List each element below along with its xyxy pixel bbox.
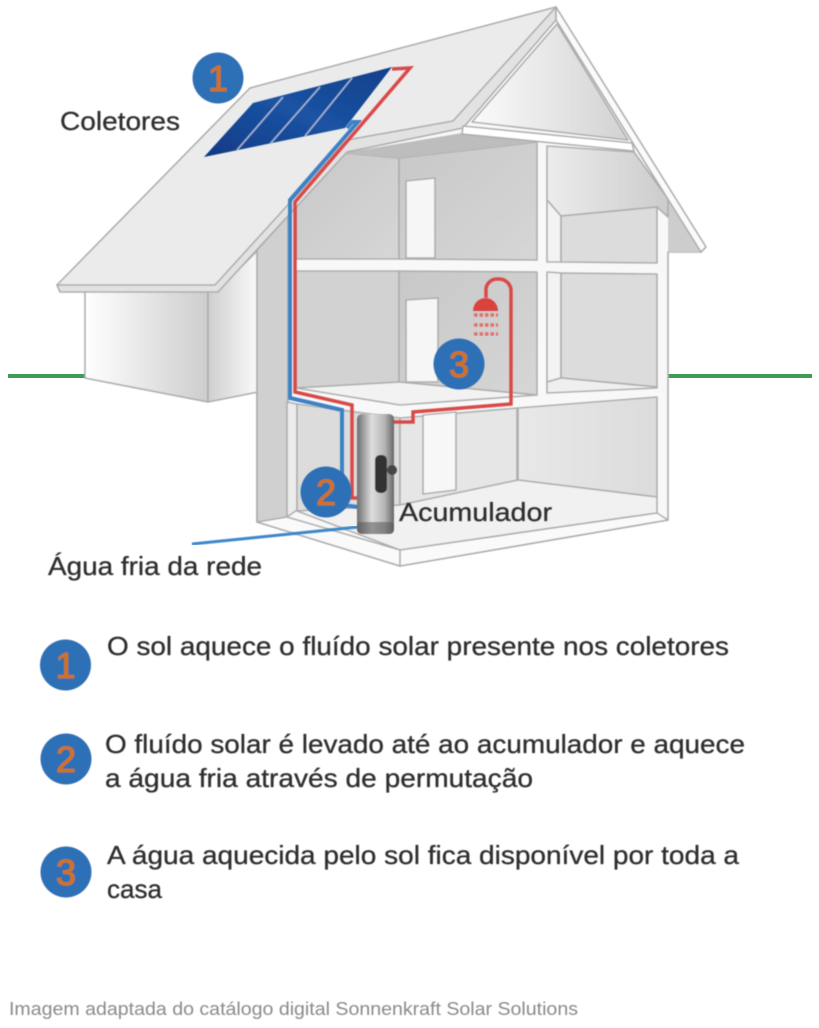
badge 3 diagram — [434, 338, 484, 390]
step 3: 3 — [56, 852, 76, 893]
step 2 — [40, 729, 745, 793]
label: Água fria da rede: Água fria da rede — [48, 551, 262, 581]
ground line left — [8, 374, 85, 378]
badge 2 diagram: 2 — [316, 472, 336, 513]
storage tank — [357, 414, 397, 534]
badge 2 diagram — [300, 466, 352, 518]
step 2: 2 — [56, 739, 76, 780]
badge 1 diagram — [192, 52, 244, 104]
red pipe to shower — [393, 279, 511, 422]
step 2: a água fria através de permutação — [105, 763, 533, 793]
ground floor rooms — [257, 397, 668, 566]
label: Acumulador: Acumulador — [399, 497, 552, 527]
step 1 — [40, 631, 729, 690]
middle floor rooms — [296, 271, 657, 405]
blue cold pipe — [290, 122, 358, 507]
badge 3 diagram: 3 — [449, 344, 469, 385]
label: Coletores: Coletores — [60, 106, 180, 136]
step 3: casa — [107, 874, 163, 904]
solar collectors — [204, 67, 392, 157]
gable triangle — [462, 7, 706, 252]
house body — [257, 20, 701, 566]
annex volume — [85, 250, 258, 402]
step 2: O fluído solar é levado até ao acumulador e aquece — [105, 729, 745, 759]
step 3 — [40, 840, 740, 904]
ground line right — [668, 374, 812, 378]
step 1: O sol aquece o fluído solar presente nos coletores — [107, 631, 729, 661]
step 3: A água aquecida pelo sol fica disponível por toda a — [107, 840, 740, 870]
main roof — [57, 7, 556, 292]
badge 1 diagram: 1 — [208, 58, 228, 99]
red hot pipe — [295, 68, 410, 498]
upper floor rooms — [296, 133, 668, 263]
image credit caption: Imagem adaptada do catálogo digital Sonnenkraft Solar Solutions — [9, 999, 578, 1019]
cold water inlet pipe — [192, 527, 358, 544]
step 1: 1 — [55, 645, 76, 686]
house illustration — [57, 7, 706, 566]
icon: shower head — [473, 298, 498, 334]
